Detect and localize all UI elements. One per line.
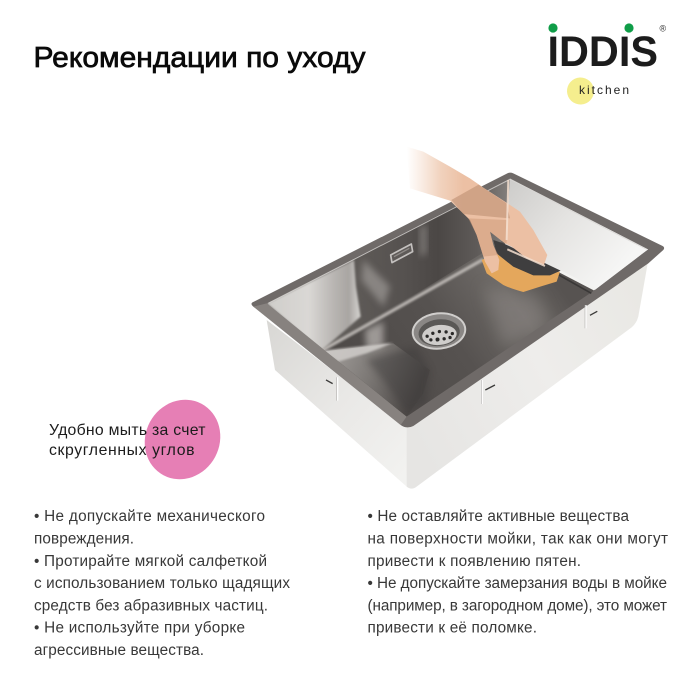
left care text: агрессивные вещества. xyxy=(34,642,204,659)
right wall xyxy=(505,178,648,290)
callout text xyxy=(49,422,206,459)
left care text xyxy=(34,508,290,659)
inner rim line xyxy=(268,179,647,303)
left care text: повреждения. xyxy=(34,530,134,548)
lower left wall xyxy=(326,344,409,416)
logo wordmark: IDDIS xyxy=(548,29,658,76)
logo registered mark: ® xyxy=(660,24,666,34)
callout text: Удобно мыть за счет xyxy=(49,422,206,439)
back wall xyxy=(267,178,510,352)
sink front outer face xyxy=(407,260,648,489)
left care text: • Не допускайте механического xyxy=(34,508,265,525)
logo green dots xyxy=(548,23,634,33)
sink rim xyxy=(251,173,664,427)
left care text: с использованием только щадящих xyxy=(34,575,290,592)
left light wall xyxy=(267,260,361,351)
right wall rail xyxy=(558,271,595,293)
wall edge reflection xyxy=(507,180,545,266)
wall reflections xyxy=(362,260,390,307)
right care text xyxy=(368,508,668,636)
hand over rim shade xyxy=(451,185,510,218)
right care text: привести к её поломке. xyxy=(368,620,537,636)
hand over basin shade xyxy=(468,218,507,257)
drain strainer xyxy=(410,310,468,352)
side clips xyxy=(326,305,597,404)
left care text: средств без абразивных частиц. xyxy=(34,598,268,614)
sponge xyxy=(482,240,561,292)
floor xyxy=(322,238,597,417)
overflow slot xyxy=(391,244,413,263)
logo sub-brand: kitchen xyxy=(579,83,629,97)
sink basin xyxy=(267,178,648,417)
callout text: скругленных углов xyxy=(49,442,194,459)
hand xyxy=(407,147,547,273)
right care text: привести к появлению пятен. xyxy=(368,553,581,570)
sponge scourer xyxy=(493,240,561,275)
hand shape xyxy=(407,147,547,273)
right care text: • Не допускайте замерзания воды в мойке xyxy=(368,575,667,592)
title: Рекомендации по уходу xyxy=(34,42,366,74)
floor shadow patches xyxy=(367,350,426,406)
right care text: (например, в загородном доме), это может xyxy=(368,598,667,614)
right care text: на поверхности мойки, так как они могут xyxy=(368,530,668,548)
right care text: • Не оставляйте активные вещества xyxy=(368,508,629,525)
callout blob xyxy=(131,386,234,493)
left care text: • Протирайте мягкой салфеткой xyxy=(34,553,267,570)
logo yellow spot xyxy=(563,74,598,108)
sink left outer face xyxy=(267,320,410,487)
left care text: • Не используйте при уборке xyxy=(34,620,245,636)
floor and wall crease highlight xyxy=(322,259,483,351)
sponge foam xyxy=(482,253,560,292)
sink illustration xyxy=(251,147,664,489)
lower-left rim sheen xyxy=(253,303,407,425)
logo: IDDIS kitchen xyxy=(548,23,666,108)
